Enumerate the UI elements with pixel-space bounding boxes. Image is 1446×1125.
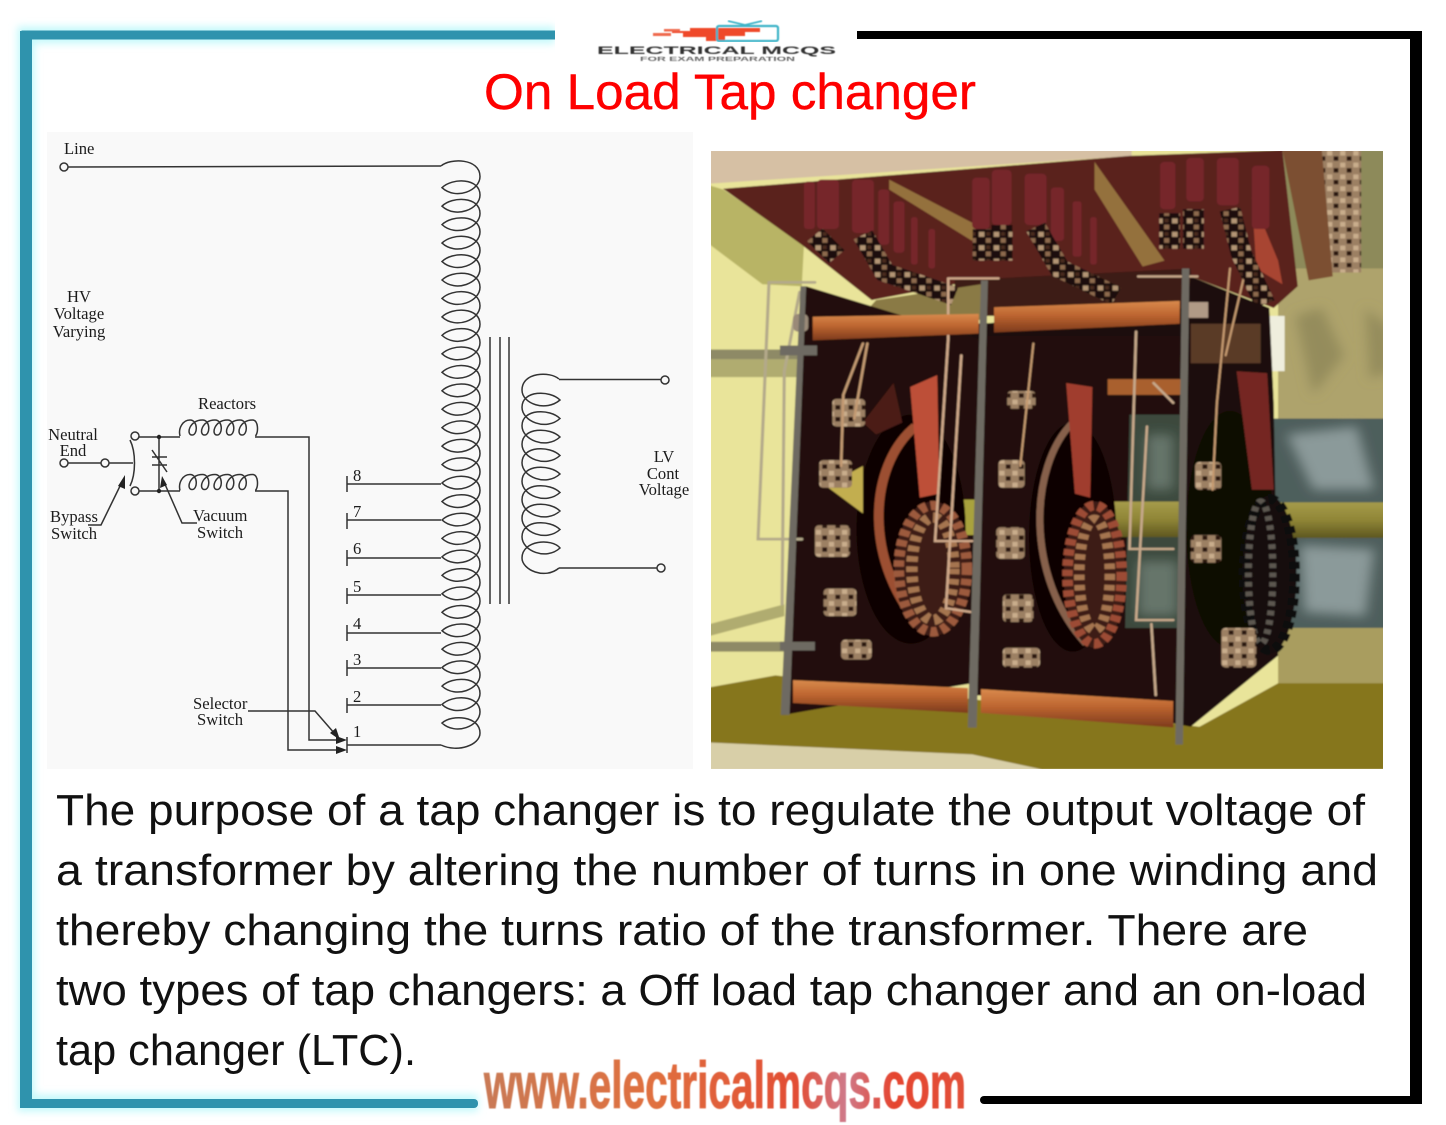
line input lead: Line xyxy=(64,139,94,158)
body text: a transformer by altering the number of turns in one winding and xyxy=(56,846,1378,895)
photo steel frame edges xyxy=(780,268,1189,744)
primary tapped winding xyxy=(441,161,480,748)
tap 7: 7 xyxy=(353,502,361,521)
vacuum switch contacts xyxy=(139,435,180,493)
secondary winding and LV leads xyxy=(522,374,669,573)
photo pipework xyxy=(758,268,1243,695)
tap 1: 1 xyxy=(353,722,361,741)
tap 8: 8 xyxy=(353,466,361,485)
body text: The purpose of a tap changer is to regulate the output voltage of xyxy=(56,786,1366,835)
label: selector switch: Switch xyxy=(197,710,244,729)
photo selector wheels xyxy=(856,411,1296,654)
tap 3 xyxy=(347,650,441,676)
photo red contact arms xyxy=(826,371,1274,513)
selector switch pointer xyxy=(248,711,340,740)
tap 7 xyxy=(347,502,441,529)
body text: two types of tap changers: a Off load tap changer and an on-load xyxy=(56,966,1367,1015)
photo background walls xyxy=(710,150,1390,769)
bypass switch pointer xyxy=(88,475,125,525)
label: selector switch: Selector xyxy=(193,694,248,713)
neutral end terminals and bypass switch xyxy=(60,432,139,495)
logo icon: red streaks and teal TV xyxy=(653,21,778,41)
footer website address: www.electricalmcqs.com xyxy=(483,1048,966,1122)
tap 2 xyxy=(347,687,441,713)
photo bolt clusters xyxy=(815,391,1256,667)
label: bypass switch: Bypass xyxy=(50,507,98,526)
tap 3: 3 xyxy=(353,650,361,669)
tap 4: 4 xyxy=(353,614,362,633)
panel: photo of on-load tap changer xyxy=(710,150,1390,769)
body text: thereby changing the turns ratio of the transformer. There are xyxy=(56,906,1308,955)
logo wordmark: ELECTRICAL MCQS xyxy=(597,45,836,57)
body text xyxy=(56,786,1378,1075)
photo drive shaft xyxy=(937,500,1390,538)
label: reactors: Reactors xyxy=(198,394,256,413)
vacuum switch pointer xyxy=(160,476,197,523)
body text: tap changer (LTC). xyxy=(56,1026,416,1075)
logo tagline: FOR EXAM PREPARATION xyxy=(640,57,795,63)
photo terminal contacts xyxy=(815,209,1265,304)
lower reactor coil xyxy=(180,474,257,490)
label: neutral end: Neutral xyxy=(48,425,98,444)
label: LV cont voltage: Cont xyxy=(647,464,680,483)
label: LV cont voltage: LV xyxy=(654,447,674,466)
photo insulating plates xyxy=(782,276,1278,727)
tap 6 xyxy=(347,539,441,566)
photo upper tube bank xyxy=(723,150,1333,320)
transformer core xyxy=(490,337,509,604)
photo copper tie rods xyxy=(793,301,1208,727)
upper reactor coil xyxy=(180,420,257,436)
label: HV voltage varying: Varying xyxy=(53,322,105,341)
tap 8 xyxy=(347,466,441,492)
tap 4 xyxy=(347,614,441,641)
label: LV cont voltage: Voltage xyxy=(639,480,689,499)
tap 6: 6 xyxy=(353,539,361,558)
tap 1 xyxy=(347,722,441,753)
label: bypass switch: Switch xyxy=(51,524,98,543)
tap 5 xyxy=(347,577,441,604)
label: vacuum switch: Switch xyxy=(197,523,244,542)
title: On Load Tap changer xyxy=(484,64,976,120)
label: HV voltage varying: Voltage xyxy=(54,304,104,323)
photo top beige cover xyxy=(710,150,1132,184)
label: vacuum switch: Vacuum xyxy=(193,506,247,525)
panel: tap changer circuit diagram xyxy=(47,132,693,769)
tap 5: 5 xyxy=(353,577,361,596)
reactor leads to selector switch xyxy=(255,437,347,754)
label: HV voltage varying: HV xyxy=(67,287,91,306)
tap 2: 2 xyxy=(353,687,361,706)
logo: Electrical MCQs xyxy=(555,0,857,63)
label: neutral end: End xyxy=(60,441,87,460)
line input lead xyxy=(60,139,441,171)
